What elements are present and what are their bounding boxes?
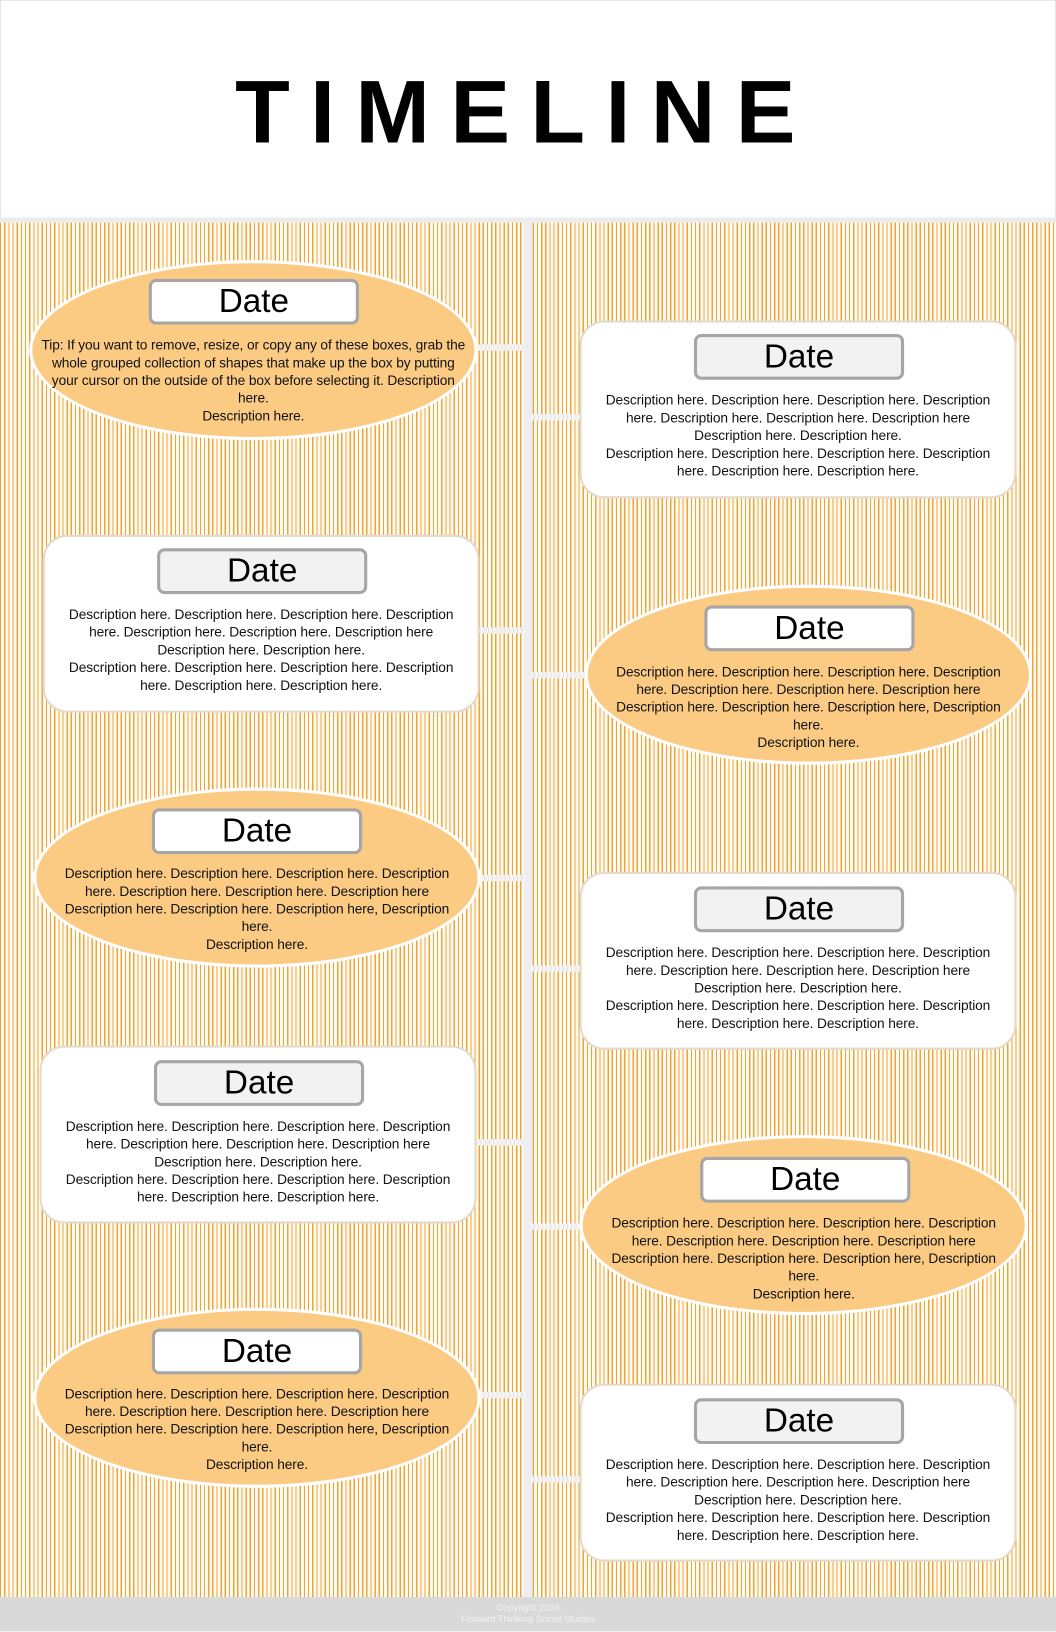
description xyxy=(606,392,990,479)
description: here. Description here. Description here. xyxy=(140,677,382,693)
description: Description here. Description here. Description here. Description xyxy=(66,1118,450,1134)
date label: Date xyxy=(770,1160,840,1197)
tip text: whole grouped collection of shapes that make up the box by putting xyxy=(52,355,455,370)
description: Description here. Description here. Description here. Description xyxy=(69,660,453,675)
description xyxy=(65,1386,449,1472)
date label xyxy=(700,1157,910,1203)
description: here. Description here. Description here. Description here xyxy=(626,1474,970,1490)
description: Description here. xyxy=(206,936,308,952)
footer xyxy=(0,1597,1056,1631)
date label xyxy=(694,886,904,932)
event L4 xyxy=(40,1046,476,1223)
description: here. Description here. Description here. xyxy=(137,1189,379,1205)
event R5 xyxy=(579,1384,1016,1562)
description: Description here. Description here. Description here, Description xyxy=(611,1251,996,1266)
date label: Date xyxy=(764,337,834,375)
event R1 xyxy=(579,320,1016,498)
description: here. Description here. Description here. Description here xyxy=(636,681,980,697)
description: Description here. Description here. Description here. Description xyxy=(611,1215,996,1231)
tip text: your cursor on the outside of the box before selecting it. Description xyxy=(52,372,455,388)
description: here. Description here. Description here. Description here xyxy=(86,1136,430,1152)
connectors xyxy=(473,344,525,351)
description: Description here. Description here. Description here. Description xyxy=(65,1386,449,1401)
description: here. Description here. Description here. xyxy=(677,463,919,479)
description: here. xyxy=(242,1439,272,1454)
description: Description here. Description here. Description here. Description xyxy=(66,1171,450,1187)
description: Description here. Description here. xyxy=(694,428,902,443)
date label: Date xyxy=(222,812,292,849)
event R3 xyxy=(579,872,1016,1050)
description: Description here. Description here. Description here. Description xyxy=(65,866,449,881)
description: Description here. Description here. xyxy=(154,1154,362,1169)
tip text xyxy=(42,337,465,424)
date label xyxy=(694,1398,904,1444)
center timeline bar xyxy=(523,223,533,1597)
description: here. Description here. Description here. Description here xyxy=(632,1233,976,1248)
description: Description here. Description here. Description here. Description xyxy=(606,945,990,960)
description: here. xyxy=(793,717,824,732)
event L2 xyxy=(43,535,480,713)
description: Description here. Description here. Description here, Description xyxy=(65,1421,449,1437)
description: Description here. Description here. Description here. Description xyxy=(606,1510,990,1525)
event L3 xyxy=(33,788,481,968)
description: Description here. xyxy=(753,1286,855,1302)
date label xyxy=(152,1329,362,1374)
description: Description here. Description here. Description here, Description xyxy=(65,901,449,917)
description xyxy=(69,607,453,693)
description: here. Description here. Description here. Description here xyxy=(89,624,433,640)
date label xyxy=(157,548,367,594)
description xyxy=(606,945,990,1031)
description: here. xyxy=(242,919,272,934)
date label: Date xyxy=(774,609,845,646)
description xyxy=(616,664,1001,750)
description: Description here. Description here. Description here. Description xyxy=(606,998,990,1013)
description: here. Description here. Description here. xyxy=(677,1527,919,1543)
description: Description here. Description here. Description here. Description xyxy=(606,392,990,408)
footer: Copyright 2016 xyxy=(496,1602,560,1613)
description: Description here. Description here. Description here. Description xyxy=(606,445,990,461)
event L5 xyxy=(33,1308,481,1488)
description: Description here. Description here. xyxy=(694,980,902,996)
footer: Forward Thinking Social Studies xyxy=(461,1614,595,1624)
description: here. Description here. Description here. Description here xyxy=(85,883,429,899)
date label xyxy=(154,1060,364,1106)
description: here. Description here. Description here. Description here xyxy=(626,962,970,978)
description xyxy=(65,866,449,952)
description: Description here. Description here. xyxy=(694,1492,902,1508)
description: Description here. Description here. xyxy=(157,642,365,658)
description: here. xyxy=(788,1268,819,1284)
event R2 xyxy=(585,585,1032,765)
description: Description here. xyxy=(206,1457,308,1472)
date label xyxy=(149,279,359,325)
tip text: Description here. xyxy=(202,408,304,423)
date label: Date xyxy=(222,1332,292,1369)
event R4 xyxy=(579,1135,1028,1315)
description: Description here. Description here. Description here, Description xyxy=(616,699,1001,715)
event L1: tip ellipse xyxy=(29,260,478,440)
description: Description here. Description here. Description here. Description xyxy=(616,664,1001,679)
date label: Date xyxy=(224,1063,294,1101)
description: here. Description here. Description here. Description here xyxy=(85,1403,429,1419)
date label: Date xyxy=(227,551,297,589)
description: Description here. xyxy=(757,735,859,750)
date label xyxy=(694,334,904,380)
date label: Date xyxy=(764,1401,834,1439)
date label xyxy=(152,808,362,854)
date label: Date xyxy=(764,890,834,927)
title: TIMELINE xyxy=(235,62,816,162)
header band xyxy=(0,0,1056,218)
date label xyxy=(704,606,915,651)
description xyxy=(66,1118,450,1205)
description xyxy=(611,1215,996,1302)
description: Description here. Description here. Description here. Description xyxy=(69,607,453,622)
description xyxy=(606,1457,990,1543)
description: Description here. Description here. Description here. Description xyxy=(606,1457,990,1472)
tip text: Tip: If you want to remove, resize, or copy any of these boxes, grab the xyxy=(42,337,465,353)
description: here. Description here. Description here. xyxy=(677,1015,919,1031)
tip text: here. xyxy=(238,390,269,406)
description: here. Description here. Description here. Description here xyxy=(626,410,970,426)
date label: Date xyxy=(219,282,289,319)
